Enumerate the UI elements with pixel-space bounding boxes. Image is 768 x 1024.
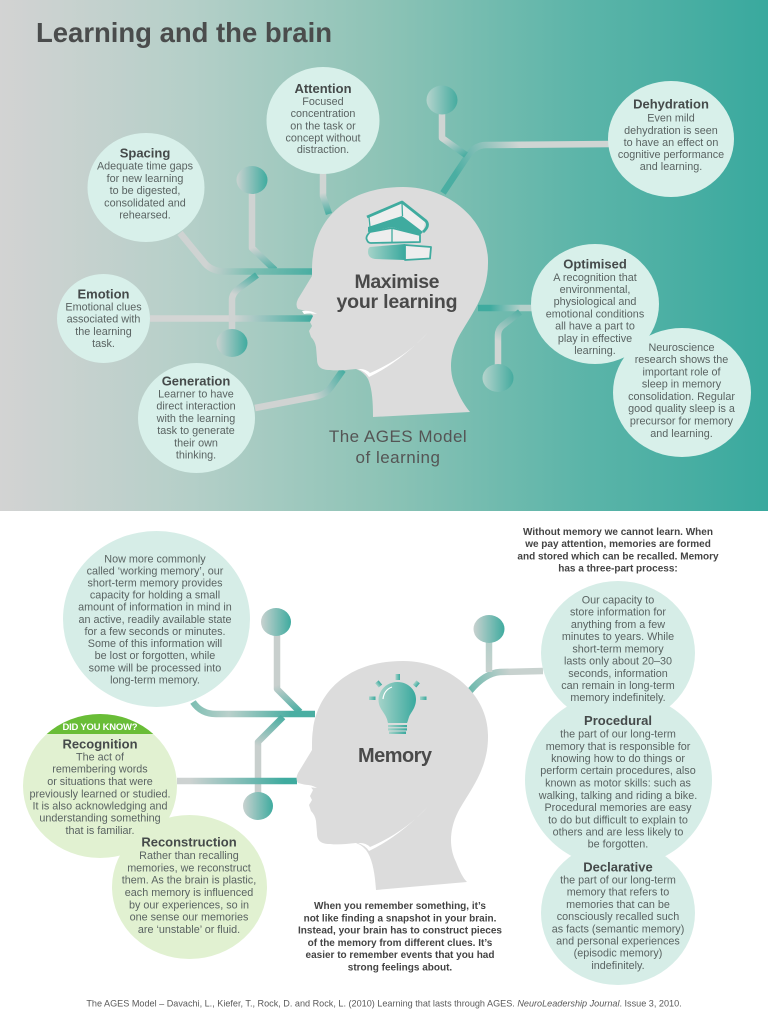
text: procedural: known as motor skills: such as xyxy=(545,778,692,790)
text: attention: concentration xyxy=(291,108,355,120)
connectors: AGES model xyxy=(150,112,612,408)
text block: when you remember: easier to remember events that you had xyxy=(306,950,494,961)
text: declarative xyxy=(552,860,684,972)
text: attention: Attention xyxy=(294,81,352,96)
text block: when you remember: not like finding a snapshot in your brain. xyxy=(304,914,497,924)
text: neuroscience: sleep in memory xyxy=(642,379,722,391)
node: memory upper left xyxy=(261,608,291,636)
text: reconstruction: each memory is influenced xyxy=(125,887,253,899)
text: optimised xyxy=(546,256,645,357)
banner: did you know xyxy=(46,714,154,734)
bubble: dehydration xyxy=(608,81,734,197)
text: reconstruction: memories, we reconstruct xyxy=(127,862,251,874)
node: emotion branch xyxy=(216,329,248,357)
text: emotion xyxy=(65,286,142,350)
text: optimised: physiological and xyxy=(554,296,636,308)
node: spacing branch xyxy=(236,166,268,194)
text: working memory: be lost or forgotten, while xyxy=(95,650,215,662)
bubble: spacing xyxy=(88,133,204,242)
text: attention: Focused xyxy=(302,96,344,108)
text: declarative: and personal experiences xyxy=(556,936,680,948)
text: generation: direct interaction xyxy=(156,401,236,413)
text: spacing: for new learning xyxy=(107,173,183,185)
connectors: memory xyxy=(177,634,543,794)
text: did you know: DID YOU KNOW? xyxy=(62,722,138,733)
node: memory lower left xyxy=(243,792,273,820)
text: reconstruction xyxy=(122,834,256,936)
heading: maximise: Maximise xyxy=(354,271,440,293)
text: dehydration xyxy=(618,96,724,173)
text: reconstruction: one sense our memories xyxy=(130,912,249,924)
text: optimised: learning. xyxy=(574,345,616,357)
text: capacity: seconds, information xyxy=(568,668,668,680)
text: recognition: that is familiar. xyxy=(65,825,135,837)
head: memory xyxy=(296,661,488,890)
node: top right xyxy=(426,86,458,114)
text block: when you remember: Instead, your brain has to construct pieces xyxy=(298,926,502,937)
text: working memory: an active, readily available state xyxy=(78,614,232,626)
text: attention: on the task or xyxy=(290,120,356,132)
text: dehydration: to have an effect on xyxy=(624,137,718,149)
text: capacity: store information for xyxy=(570,606,666,618)
text: spacing: Adequate time gaps xyxy=(97,160,194,172)
text: working memory: long-term memory. xyxy=(110,674,200,686)
text: working memory: for a few seconds or minutes. xyxy=(84,626,226,638)
node: memory right xyxy=(474,615,504,643)
bubble: reconstruction xyxy=(112,815,267,959)
bubble: neuroscience xyxy=(613,328,751,457)
text: procedural xyxy=(538,713,697,851)
text: working memory: capacity for holding a small xyxy=(90,590,220,602)
text: procedural: walking, talking and riding a bike. xyxy=(538,790,697,802)
footer: citation: The AGES Model – Davachi, L., Kiefer, T., Rock, D. and Rock, L. (2010) Learning that lasts through AGES. NeuroLeadership Journal. Issue 3, 2010. xyxy=(86,998,682,1008)
text block: when you remember: When you remember something, it’s xyxy=(314,901,486,912)
intro text: three-part process: has a three-part process: xyxy=(558,564,678,574)
text: emotion: the learning xyxy=(75,326,132,338)
text: neuroscience: precursor for memory xyxy=(630,416,734,428)
text: spacing: consolidated and xyxy=(104,197,186,209)
text: optimised: emotional conditions xyxy=(546,308,645,320)
text: declarative: Declarative xyxy=(583,860,653,874)
text: emotion: Emotional clues xyxy=(65,302,142,314)
text: spacing: rehearsed. xyxy=(119,210,171,222)
text: dehydration: Dehydration xyxy=(633,96,709,112)
text: dehydration: dehydration is seen xyxy=(624,125,718,137)
text: recognition: It is also acknowledging and xyxy=(32,800,168,812)
text: procedural: Procedural memories are easy xyxy=(544,802,692,814)
text: emotion: Emotion xyxy=(78,286,130,302)
caption: the AGES model: The AGES Model xyxy=(329,427,467,446)
text: recognition: understanding something xyxy=(39,813,161,825)
text: spacing: to be digested, xyxy=(110,185,180,197)
head: maximise your learning xyxy=(296,187,488,417)
text: reconstruction: by our experiences, so in xyxy=(129,899,249,911)
node: optimised branch xyxy=(482,364,514,392)
text: capacity: anything from a few xyxy=(571,619,665,631)
text: declarative: (episodic memory) xyxy=(574,948,662,960)
intro text: three-part process: and stored which can be recalled. Memory xyxy=(517,551,719,562)
text: optimised: all have a part to xyxy=(555,321,635,333)
text: generation: with the learning xyxy=(156,413,235,425)
text: reconstruction: Rather than recalling xyxy=(139,850,239,862)
bubble: declarative xyxy=(541,841,695,985)
text: emotion: task. xyxy=(92,338,115,350)
text: recognition xyxy=(29,736,171,837)
intro text: three-part process: Without memory we cannot learn. When xyxy=(523,527,713,538)
bubble: optimised xyxy=(531,244,659,364)
text: declarative: memories that can be xyxy=(566,899,670,911)
bubble: recognition xyxy=(23,714,177,858)
text: neuroscience: Neuroscience xyxy=(648,342,715,354)
text: capacity: short-term memory xyxy=(572,643,664,655)
text: generation xyxy=(156,374,236,462)
title: Learning and the brain xyxy=(36,17,332,48)
text: neuroscience: consolidation. Regular xyxy=(628,391,735,403)
text: recognition: Recognition xyxy=(62,736,138,752)
bubble: attention xyxy=(266,67,380,174)
text: capacity: Our capacity to xyxy=(582,594,654,606)
icon: light bulb xyxy=(369,674,426,734)
panel: AGES model background xyxy=(0,0,768,511)
text: generation: task to generate xyxy=(157,425,235,437)
text: dehydration: and learning. xyxy=(640,161,702,173)
text: generation: Learner to have xyxy=(158,388,234,400)
text: working memory: Now more commonly xyxy=(104,554,206,566)
text: neuroscience: important role of xyxy=(642,366,722,378)
heading: your learning: your learning xyxy=(336,291,458,313)
text: procedural: Procedural xyxy=(584,713,652,728)
text block: when you remember: of the memory from different clues. It’s xyxy=(308,938,493,949)
text: declarative: consciously recalled such xyxy=(557,911,679,923)
text: dehydration: Even mild xyxy=(647,113,695,125)
text: capacity: memory indefinitely. xyxy=(570,692,666,704)
text: declarative: indefinitely. xyxy=(591,960,645,972)
text: optimised: A recognition that xyxy=(553,272,637,284)
text: dehydration: cognitive performance xyxy=(618,149,724,161)
text: working memory: short-term memory provides xyxy=(88,578,223,590)
text: recognition: or situations that were xyxy=(47,776,153,788)
bubble: working memory xyxy=(63,531,250,707)
text: capacity: can remain in long-term xyxy=(561,680,675,692)
text: capacity: minutes to years. While xyxy=(562,631,674,643)
text: reconstruction: them. As the brain is plastic, xyxy=(122,874,256,886)
bubble: capacity xyxy=(541,581,695,725)
text: neuroscience: research shows the xyxy=(635,354,728,366)
text block: when you remember: strong feelings about. xyxy=(348,962,452,974)
text: procedural: knowing how to do things or xyxy=(551,753,685,765)
text: attention: distraction. xyxy=(297,144,349,156)
text: generation: their own xyxy=(174,437,218,449)
text: capacity: lasts only about 20–30 xyxy=(564,656,672,668)
text: optimised: play in effective xyxy=(558,333,632,345)
text: neuroscience: good quality sleep is a xyxy=(628,403,735,415)
text: recognition: The act of xyxy=(76,752,125,764)
intro text: three-part process: we pay attention, memories are formed xyxy=(524,539,711,550)
text: spacing xyxy=(97,146,194,222)
text: generation: Generation xyxy=(162,374,230,388)
text: procedural: memory that is responsible for xyxy=(546,741,691,753)
text: procedural: perform certain procedures, also xyxy=(540,765,696,777)
text: recognition: previously learned or studied. xyxy=(29,788,171,800)
text: procedural: others and are less likely to xyxy=(553,826,683,838)
text: reconstruction: Reconstruction xyxy=(141,834,237,850)
text: neuroscience: and learning. xyxy=(650,428,713,440)
bubble: emotion xyxy=(57,274,150,363)
heading: memory: Memory xyxy=(358,745,433,767)
text: attention xyxy=(285,81,361,156)
text: working memory: called ‘working memory’, our xyxy=(87,566,224,578)
text: declarative: memory that refers to xyxy=(567,886,669,898)
caption: the AGES model: of learning xyxy=(356,448,440,467)
text: optimised: environmental, xyxy=(560,284,630,296)
text: attention: concept without xyxy=(285,133,361,145)
text: procedural: to do but difficult to explain to xyxy=(548,814,688,826)
text: working memory: some will be processed into xyxy=(89,662,221,674)
text: declarative: the part of our long-term xyxy=(560,874,676,886)
text: emotion: associated with xyxy=(67,314,140,326)
text: declarative: as facts (semantic memory) xyxy=(552,923,684,935)
text: working memory: amount of information in mind in xyxy=(78,602,232,614)
bubble: procedural xyxy=(525,692,712,868)
text: procedural: the part of our long-term xyxy=(560,729,676,741)
text: procedural: be forgotten. xyxy=(588,839,648,851)
icon: books xyxy=(366,202,431,260)
text: spacing: Spacing xyxy=(120,146,170,160)
text: generation: thinking. xyxy=(176,450,216,462)
text: optimised: Optimised xyxy=(563,256,627,272)
text: recognition: remembering words xyxy=(52,764,148,776)
bubble: generation xyxy=(138,363,255,473)
text: reconstruction: are ‘unstable’ or fluid. xyxy=(138,924,240,936)
text: working memory: Some of this information will xyxy=(88,638,222,650)
